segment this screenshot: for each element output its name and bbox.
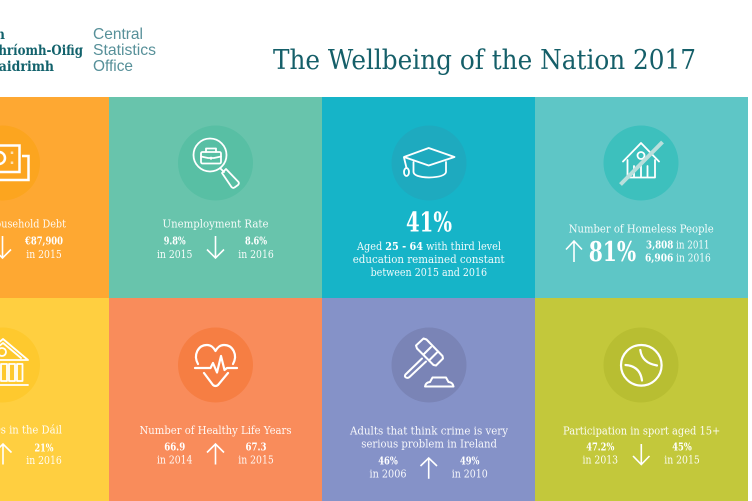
heading [349,424,508,451]
icon: graduation cap [404,148,454,178]
value: 2016: in 2016 [238,247,274,261]
icon: heart with pulse [195,345,237,386]
icon: government building [0,339,28,385]
logo: English name: Office [93,58,133,75]
values: 3,808 in 2011 [646,238,710,252]
panel: unemployment rate [109,97,322,298]
value: 2013: 47.2% [586,440,614,454]
value: 2010 [452,454,488,481]
value: 2014: 66.9 [164,440,185,454]
header logo [0,26,156,75]
value: 2015 [664,440,700,467]
heading: serious problem in Ireland [361,437,498,451]
panel: sport participation [535,298,748,501]
value: 2006: in 2006 [370,467,406,481]
value: 2015: 45% [672,440,692,454]
value: 2015 [24,234,63,261]
icon: magnifier with briefcase [194,138,239,188]
panel: TDs in the Dail [0,298,109,501]
panel: healthy life years [109,298,322,501]
value: 2010: in 2010 [452,467,488,481]
description: Aged 25 - 64 with third level [356,239,501,253]
arrow: down [207,236,224,258]
icon: crossed out house [620,142,662,184]
panel: third level education [322,97,535,298]
icon: tennis ball [621,345,662,386]
arrow: up [566,241,582,262]
value: 2016 [26,440,62,467]
value: 2014: in 2014 [157,453,192,467]
value: 2015: in 2015 [157,247,192,261]
value: 2015: in 2015 [238,453,274,467]
value: 2015 [157,234,192,261]
logo: English name: Statistics [93,42,156,59]
title: The Wellbeing of the Nation 2017 [273,44,696,76]
arrow: down [633,444,650,464]
big figure: 81% [589,237,636,268]
value: 2015: in 2015 [664,453,700,467]
value: 2016: 8.6% [245,234,267,248]
values: 6,906 in 2016 [645,251,711,265]
value: 2015: 67.3 [246,440,266,454]
value: 2013: in 2013 [583,453,618,467]
value: 2006: 46% [378,454,398,468]
heading: Unemployment Rate [162,216,269,230]
logo: English name: Central [93,26,143,43]
description: between 2015 and 2016 [371,265,487,279]
icon: gavel [405,338,454,386]
heading: Participation in sport aged 15+ [563,424,720,438]
logo: English name [93,26,156,75]
panel: crime perception [322,298,535,501]
value: 2006 [370,454,406,481]
panel: household debt [0,97,109,298]
heading: Adults that think crime is very [349,424,508,438]
arrow: up [0,444,12,464]
arrow: down [0,236,11,258]
big figure: 41% [406,207,452,238]
value: 2015 [238,440,274,467]
description: education remained constant [353,252,505,266]
value: 2014 [157,440,192,467]
arrow: up [207,444,224,464]
value: 2010: 49% [460,454,479,468]
value: 2016: in 2016 [26,453,62,467]
panel: homeless people [535,97,748,298]
icon: banknotes [0,146,28,180]
logo: Irish name [0,27,83,75]
value: 2015: in 2015 [26,247,62,261]
heading: Number of Healthy Life Years [140,423,292,437]
value: 2015: 9.8% [164,234,186,248]
values [645,238,711,265]
heading: Number of Homeless People [569,221,714,235]
arrow: up [420,458,437,479]
value: 2016 [238,234,274,261]
value: 2015: €87,900 [24,234,63,248]
description [353,239,505,279]
value: 2013 [583,440,618,467]
value: 2016: 21% [34,440,54,454]
